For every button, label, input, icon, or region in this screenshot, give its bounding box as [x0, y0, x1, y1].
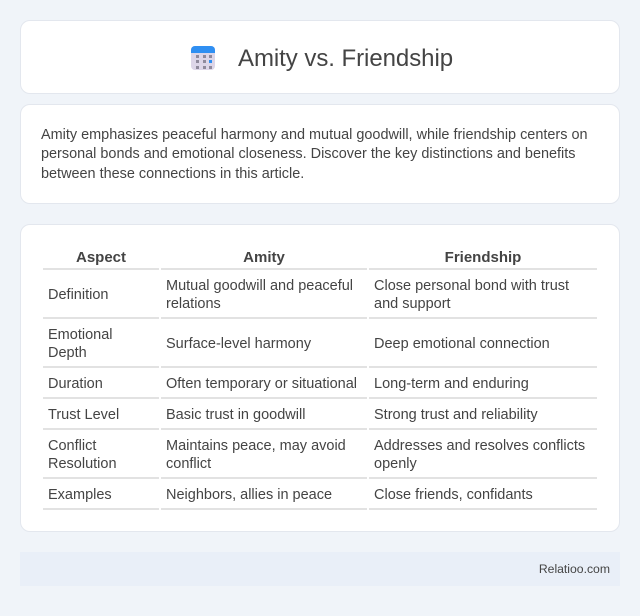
row: Emotional Depth: Emotional [48, 327, 112, 343]
comparison table: conflict [166, 456, 211, 472]
footer text: Relatioo.com [539, 562, 610, 576]
row: Examples: Examples [48, 487, 112, 503]
comparison table: Addresses and resolves conflicts [374, 438, 585, 454]
comparison table: relations [166, 296, 221, 312]
column heading: Amity: Amity [243, 249, 285, 266]
comparison table: Mutual goodwill and peaceful [166, 278, 353, 294]
comparison table: Basic trust in goodwill [166, 407, 305, 423]
header card [20, 20, 620, 94]
comparison table: openly [374, 456, 417, 472]
comparison table: Long-term and enduring [374, 376, 529, 392]
comparison table: Surface-level harmony [166, 336, 311, 352]
intro text: between these connections in this article. [41, 166, 304, 182]
comparison table: and support [374, 296, 451, 312]
intro text: Amity emphasizes peaceful harmony and mutual goodwill, while friendship centers on [41, 127, 588, 143]
comparison table: Close personal bond with trust [374, 278, 569, 294]
row: Trust Level: Trust Level [48, 407, 119, 423]
title: Amity vs. Friendship [238, 45, 453, 72]
comparison table: Often temporary or situational [166, 376, 357, 392]
column heading: Friendship: Friendship [445, 249, 521, 266]
row: Definition: Definition [48, 287, 108, 303]
comparison table: Deep emotional connection [374, 336, 550, 352]
comparison table: Strong trust and reliability [374, 407, 538, 423]
column heading: Aspect: Aspect [76, 249, 126, 266]
row: Conflict Resolution: Conflict [48, 438, 96, 454]
comparison table: Depth [48, 345, 87, 361]
icon: calendar [191, 46, 215, 70]
comparison table: Resolution [48, 456, 117, 472]
comparison table: Maintains peace, may avoid [166, 438, 346, 454]
table panel [20, 224, 620, 532]
intro text: personal bonds and emotional closeness. Discover the key distinctions and benefits [41, 146, 576, 162]
footer bar [20, 552, 620, 586]
comparison table: Close friends, confidants [374, 487, 533, 503]
intro text [41, 127, 588, 182]
intro panel [20, 104, 620, 204]
row: Duration: Duration [48, 376, 103, 392]
comparison table: Neighbors, allies in peace [166, 487, 332, 503]
